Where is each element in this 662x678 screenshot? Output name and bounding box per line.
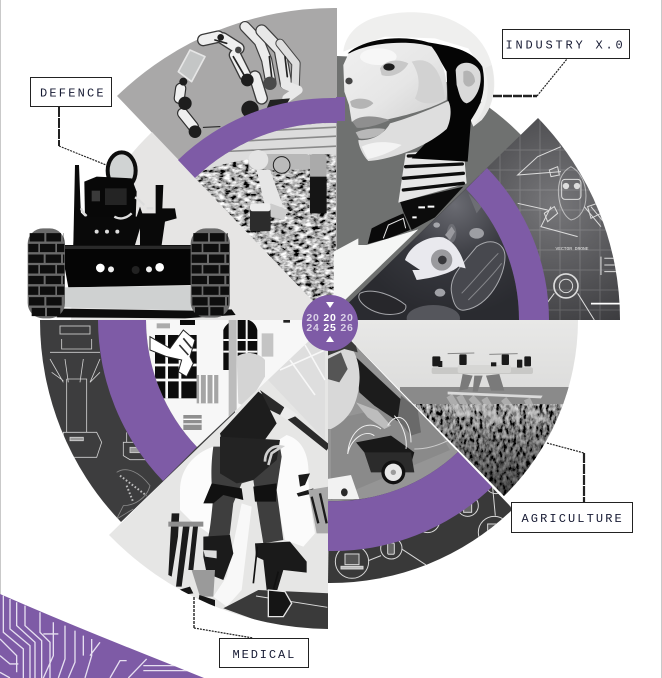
antenna: [73, 165, 82, 247]
crop field: [412, 402, 564, 496]
icon: robotic hand: [178, 27, 298, 138]
purple ring: upper right: [466, 168, 549, 320]
ceiling lines: [280, 345, 325, 395]
year grid: 20: [306, 312, 320, 324]
icon: humanoid robot neck and shoulder: [334, 147, 467, 300]
top strip icon: [60, 326, 90, 334]
leader line: industry: [493, 59, 567, 96]
black window grids: [155, 335, 197, 398]
leader line: defence: [59, 107, 106, 165]
lips: [352, 116, 390, 128]
panel: microbot image wedge: [349, 190, 519, 320]
forehead highlight: [360, 48, 397, 65]
micro organisms: [359, 193, 505, 332]
center badge 2020-2026: [302, 295, 358, 351]
child and shirt: [328, 339, 448, 499]
chassis: [63, 245, 198, 287]
leader line: medical: [194, 597, 253, 638]
blueprint caption: VECTOR DRONE: [555, 246, 589, 252]
label: defence: DEFENCE: [40, 86, 106, 100]
purple ring: upper left: [178, 98, 337, 178]
blueprint drone drawing: [518, 147, 621, 320]
white background: [146, 320, 308, 447]
neck collar: [400, 187, 463, 230]
ear inner: [463, 71, 475, 87]
chin highlight: [362, 142, 402, 159]
panel: robotic hand wedge: [117, 8, 337, 320]
camera screens: [92, 191, 100, 201]
sky band: [203, 123, 336, 171]
jaw plate: [358, 101, 451, 161]
robot arm: [248, 150, 327, 231]
sensor head: [84, 177, 137, 218]
sky: [352, 320, 578, 394]
chest straps: [368, 213, 410, 244]
purple ring end behind head: [336, 97, 345, 121]
panel: child building robot image: [328, 341, 458, 501]
bottom shadow: [57, 307, 236, 318]
background: [109, 350, 328, 619]
label: medical: MEDICAL: [232, 648, 296, 662]
purple ring: lower right: [327, 452, 492, 551]
year grid: 24: [306, 322, 320, 334]
panel: agriculture drone wedge: [352, 320, 578, 496]
dark background: [328, 450, 518, 585]
cheek shadow: [412, 60, 445, 103]
helmet: [343, 12, 494, 127]
neck base: [398, 147, 467, 203]
shoulder: [334, 229, 418, 300]
year grid: 26: [340, 322, 354, 334]
badge circle: [302, 295, 358, 351]
lights: [96, 264, 105, 272]
icon: defence rover robot: [28, 152, 236, 318]
wedge background: [117, 8, 337, 320]
panel: blueprint drone wedge: [349, 118, 620, 320]
eye: [383, 63, 395, 71]
table shading: [331, 400, 450, 500]
drone sprayer: [432, 353, 543, 424]
year grid: 20: [340, 312, 354, 324]
label: agriculture: [512, 502, 632, 532]
panel: defence wedge background: [71, 132, 331, 320]
ear: [456, 63, 481, 103]
label: agriculture: AGRICULTURE: [522, 512, 624, 526]
right wheel: [191, 228, 230, 318]
blueprint grid: [480, 120, 620, 320]
label: industry x.0: INDUSTRY X.0: [506, 38, 626, 52]
blueprint background: [349, 118, 620, 320]
face: [343, 43, 447, 122]
icon: humanoid robot head: [343, 12, 494, 162]
panel: industry wedge background: [335, 56, 521, 322]
top triangle: [326, 302, 334, 308]
panel: medical exoskeleton image: [109, 341, 328, 629]
horizon stripes: [215, 127, 340, 152]
label: medical: [220, 638, 308, 668]
eye socket: [380, 61, 408, 76]
table: [328, 342, 458, 501]
panel: network icons wedge: [328, 450, 518, 585]
panel: west blueprint wedge: [35, 320, 235, 530]
bottom triangle: [326, 336, 334, 342]
black head interior: [348, 38, 484, 162]
purple corner: [0, 590, 210, 678]
year grid: 25: [323, 322, 337, 334]
far eye: [345, 78, 353, 84]
left wheel: [28, 228, 65, 318]
neck stripes: [403, 154, 463, 190]
label: industry x.0: [502, 30, 630, 58]
head frame: [73, 185, 177, 247]
circuit corner decoration: [0, 590, 210, 678]
underbody: [61, 286, 192, 311]
field darkening: [420, 408, 560, 496]
robot arm outlines: [50, 339, 150, 519]
white details: [81, 197, 153, 218]
panel: robot arm image in field: [195, 123, 336, 301]
field texture: [195, 123, 336, 301]
ceiling panel: [268, 322, 325, 440]
rover loop handle: [108, 152, 136, 189]
label: defence: [30, 78, 112, 106]
helmet rim: [473, 65, 494, 126]
medical scene: [168, 390, 330, 630]
nose: [350, 99, 373, 109]
panel: inverted robot lab image: [146, 320, 308, 447]
micro background: [349, 190, 519, 320]
circuit traces: [0, 596, 193, 678]
robot car: [356, 436, 414, 460]
leader line: agriculture: [547, 443, 584, 502]
lab scene: [150, 319, 290, 430]
dark background: [35, 320, 235, 530]
year grid: 20: [323, 312, 337, 324]
purple ring: west: [98, 320, 197, 481]
horizon: [400, 387, 580, 404]
network diagram: [334, 488, 511, 579]
